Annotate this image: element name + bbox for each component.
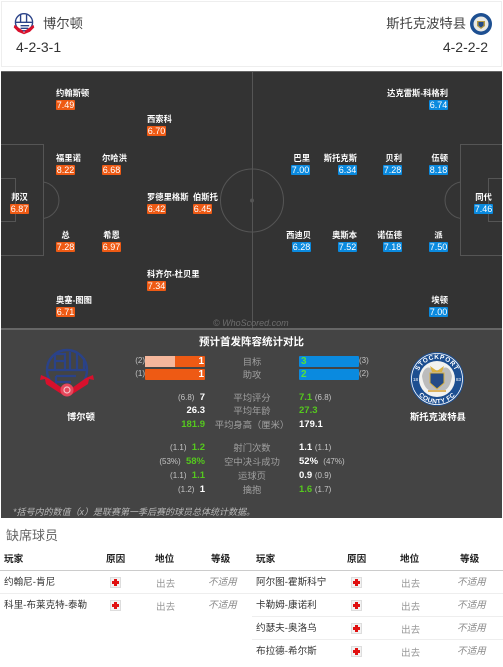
row: 布拉德-希尔斯 <box>252 640 503 663</box>
team name: Stockport: 斯托克波特县 <box>386 16 466 31</box>
row: 约翰尼-肯尼 <box>0 571 252 594</box>
player: 奥斯本 <box>332 230 357 252</box>
player: 派 <box>429 230 448 252</box>
icon: injury <box>351 623 362 634</box>
team label: Stockport: 斯托克波特县 <box>410 412 466 422</box>
label: dribbles: 运球页 <box>238 471 266 481</box>
footnote: *括号内的数值（x）是联赛第一季后赛的球员总体统计数据。 <box>13 507 255 517</box>
stat right: dribbles: 0.9 (0.9) <box>299 470 331 481</box>
icon: Bolton crest <box>40 348 94 396</box>
icon: injury <box>110 577 121 588</box>
player: 邦汉 <box>10 192 29 214</box>
icon: Stockport crest small <box>470 13 492 35</box>
player: 希恩: 希恩 <box>103 230 120 240</box>
player: 巴里 <box>291 153 310 175</box>
prior: assists Stockport: (2) <box>359 369 369 378</box>
status: 出去 <box>401 648 420 659</box>
status: 出去 <box>156 579 175 590</box>
icon: injury <box>110 600 121 611</box>
bar: goals, Stockport <box>299 356 359 367</box>
icon: Stockport crest: 18 <box>413 377 418 382</box>
icon: Stockport crest: COUNTY FC <box>420 392 454 404</box>
name: 布拉德-希尔斯 <box>256 646 317 657</box>
status: 出去 <box>401 625 420 636</box>
prior: goals Stockport: (3) <box>359 356 369 365</box>
status: 出去 <box>401 602 420 613</box>
player: 科齐尔-杜贝里: 科齐尔-杜贝里 <box>147 269 200 279</box>
bar: goals, Bolton <box>145 356 205 367</box>
player: 福里诺: 8.22 <box>57 165 74 175</box>
player: 约翰斯顿: 约翰斯顿 <box>56 88 89 98</box>
panel: match header <box>1 1 502 67</box>
table header: left <box>0 552 252 571</box>
name: 约瑟夫-奥洛乌 <box>256 623 317 634</box>
stat right: height: 179.1 <box>299 419 323 430</box>
name: 卡勒姆-康诺利 <box>256 600 317 611</box>
column: reason: 原因 <box>106 554 125 565</box>
player: 斯托克斯: 斯托克斯 <box>324 153 357 163</box>
watermark: © WhoScored.com <box>213 318 289 328</box>
player: 诺伍德 <box>377 230 402 252</box>
player: 希恩 <box>102 230 121 252</box>
player: 总 <box>56 230 75 252</box>
label: assists: 助攻 <box>243 370 261 380</box>
player: 科齐尔-杜贝里: 7.34 <box>148 281 165 291</box>
panel: stats comparison <box>1 328 502 518</box>
stat left: rating: (6.8) 7 <box>178 392 205 403</box>
player: 科齐尔-杜贝里 <box>147 269 200 291</box>
rating: 不适用 <box>457 623 486 634</box>
stat left: dribbles: (1.1) 1.1 <box>170 470 205 481</box>
value: 2 <box>301 369 307 380</box>
player: 西迪贝: 6.28 <box>293 242 310 252</box>
heading: 缺席球员 <box>6 528 58 543</box>
icon: Stockport crest <box>410 352 464 406</box>
player: 邦汉: 邦汉 <box>11 192 28 202</box>
player: 西索科: 西索科 <box>147 114 172 124</box>
stat left: tackles: (1.2) 1 <box>178 484 205 495</box>
player: 派: 7.50 <box>430 242 447 252</box>
player: 伍顿: 8.18 <box>430 165 447 175</box>
player: 奥斯本: 7.52 <box>339 242 356 252</box>
player: 总: 7.28 <box>57 242 74 252</box>
prior: goals Bolton: (2) <box>135 356 145 365</box>
stat right: shots: 1.1 (1.1) <box>299 442 331 453</box>
row: 卡勒姆-康诺利 <box>252 594 503 617</box>
player: 达克雷斯-科格利: 6.74 <box>430 100 447 110</box>
table header: right <box>252 552 503 571</box>
column: reason: 原因 <box>347 554 366 565</box>
bar: assists, Bolton <box>145 369 205 380</box>
player: 斯托克斯: 6.34 <box>339 165 356 175</box>
icon: injury <box>351 646 362 657</box>
icon: injury <box>351 577 362 588</box>
player: 奥塞-图图 <box>56 295 92 317</box>
player: 诺伍德: 诺伍德 <box>377 230 402 240</box>
stat left: shots: (1.1) 1.2 <box>170 442 205 453</box>
player: 埃顿 <box>429 295 448 317</box>
player: 奥斯本: 奥斯本 <box>332 230 357 240</box>
stat left: aerials: (53%) 58% <box>159 456 205 467</box>
prior: assists Bolton: (1) <box>135 369 145 378</box>
team label: Bolton: 博尔顿 <box>67 412 95 422</box>
value: 3 <box>301 356 307 367</box>
player: 希恩: 6.97 <box>103 242 120 252</box>
value: 1 <box>198 356 204 367</box>
pitch markings <box>1 72 502 328</box>
bar: goals prior season <box>145 356 175 367</box>
stat left: age: 26.3 <box>186 405 205 416</box>
player: 埃顿: 埃顿 <box>431 295 448 305</box>
player: 尔哈洪 <box>102 153 127 175</box>
player: 西迪贝 <box>286 230 311 252</box>
rating: 不适用 <box>457 577 486 588</box>
player: 罗德里格斯: 罗德里格斯 <box>147 192 188 202</box>
name: 阿尔图-霍斯科宁 <box>256 577 326 588</box>
column: location: 地位 <box>155 554 174 565</box>
column: grade: 等级 <box>211 554 230 565</box>
column: player: 玩家 <box>4 554 23 565</box>
team name: Bolton: 博尔顿 <box>43 16 83 31</box>
player: 同代: 同代 <box>475 192 492 202</box>
player: 尔哈洪: 6.68 <box>103 165 120 175</box>
status: 出去 <box>156 602 175 613</box>
stat left: height: 181.9 <box>181 419 205 430</box>
label: aerials: 空中决斗成功 <box>224 457 280 467</box>
player: 派: 派 <box>434 230 443 240</box>
name: 约翰尼-肯尼 <box>4 577 55 588</box>
player: 同代 <box>474 192 493 214</box>
rating: 不适用 <box>208 600 237 611</box>
icon: Stockport crest: 83 <box>456 377 461 382</box>
row: 阿尔图-霍斯科宁 <box>252 571 503 594</box>
label: height: 平均身高（厘米） <box>215 420 289 430</box>
name: 科里-布莱克特-泰勒 <box>4 600 87 611</box>
player: 同代: 7.46 <box>475 204 492 214</box>
formation: Bolton: 4-2-3-1 <box>16 39 61 55</box>
icon: injury <box>351 600 362 611</box>
player: 约翰斯顿 <box>56 88 89 110</box>
stats title: 预计首发阵容统计对比 <box>199 336 304 348</box>
player: 西索科 <box>147 114 172 136</box>
player: 总: 总 <box>61 230 70 240</box>
player: 贝利 <box>383 153 402 175</box>
player: 尔哈洪: 尔哈洪 <box>102 153 127 163</box>
rating: 不适用 <box>457 646 486 657</box>
player: 罗德里格斯 <box>147 192 188 214</box>
row: 科里-布莱克特-泰勒 <box>0 594 252 617</box>
icon: Stockport crest: STOCKPORT <box>415 354 459 370</box>
stat right: rating: 7.1 (6.8) <box>299 392 331 403</box>
status: 出去 <box>401 579 420 590</box>
player: 诺伍德: 7.18 <box>384 242 401 252</box>
player: 达克雷斯-科格利 <box>387 88 448 110</box>
player: 巴里: 巴里 <box>293 153 310 163</box>
player: 贝利: 7.28 <box>384 165 401 175</box>
player: 西迪贝: 西迪贝 <box>286 230 311 240</box>
column: location: 地位 <box>400 554 419 565</box>
stat right: aerials: 52% (47%) <box>299 456 345 467</box>
player: 奥塞-图图: 6.71 <box>57 307 74 317</box>
label: tackles: 擒抱 <box>243 485 261 495</box>
player: 伯斯托: 6.45 <box>194 204 211 214</box>
player: 斯托克斯 <box>324 153 357 175</box>
formation: Stockport: 4-2-2-2 <box>443 39 488 55</box>
player: 伯斯托: 伯斯托 <box>193 192 218 202</box>
icon: Bolton crest small <box>14 13 34 34</box>
player: 伯斯托 <box>193 192 218 214</box>
column: grade: 等级 <box>460 554 479 565</box>
label: shots: 射门次数 <box>233 443 271 453</box>
label: age: 平均年龄 <box>233 406 271 416</box>
player: 巴里: 7.00 <box>292 165 309 175</box>
player: 福里诺: 福里诺 <box>56 153 81 163</box>
column: player: 玩家 <box>256 554 275 565</box>
player: 西索科: 6.70 <box>148 126 165 136</box>
bar: assists, Stockport <box>299 369 359 380</box>
rating: 不适用 <box>208 577 237 588</box>
panel: pitch <box>1 71 502 329</box>
panel: missing players <box>0 518 503 667</box>
row: 约瑟夫-奥洛乌 <box>252 617 503 640</box>
player: 伍顿 <box>429 153 448 175</box>
stat right: tackles: 1.6 (1.7) <box>299 484 331 495</box>
player: 邦汉: 6.87 <box>11 204 28 214</box>
player: 贝利: 贝利 <box>385 153 402 163</box>
rating: 不适用 <box>457 600 486 611</box>
player: 约翰斯顿: 7.49 <box>57 100 74 110</box>
player: 埃顿: 7.00 <box>430 307 447 317</box>
value: 1 <box>198 369 204 380</box>
player: 伍顿: 伍顿 <box>431 153 448 163</box>
label: goals: 目标 <box>243 357 261 367</box>
player: 奥塞-图图: 奥塞-图图 <box>56 295 92 305</box>
stat right: age: 27.3 <box>299 405 318 416</box>
label: rating: 平均评分 <box>233 393 271 403</box>
player: 达克雷斯-科格利: 达克雷斯-科格利 <box>387 88 448 98</box>
player: 罗德里格斯: 6.42 <box>148 204 165 214</box>
player: 福里诺 <box>56 153 81 175</box>
